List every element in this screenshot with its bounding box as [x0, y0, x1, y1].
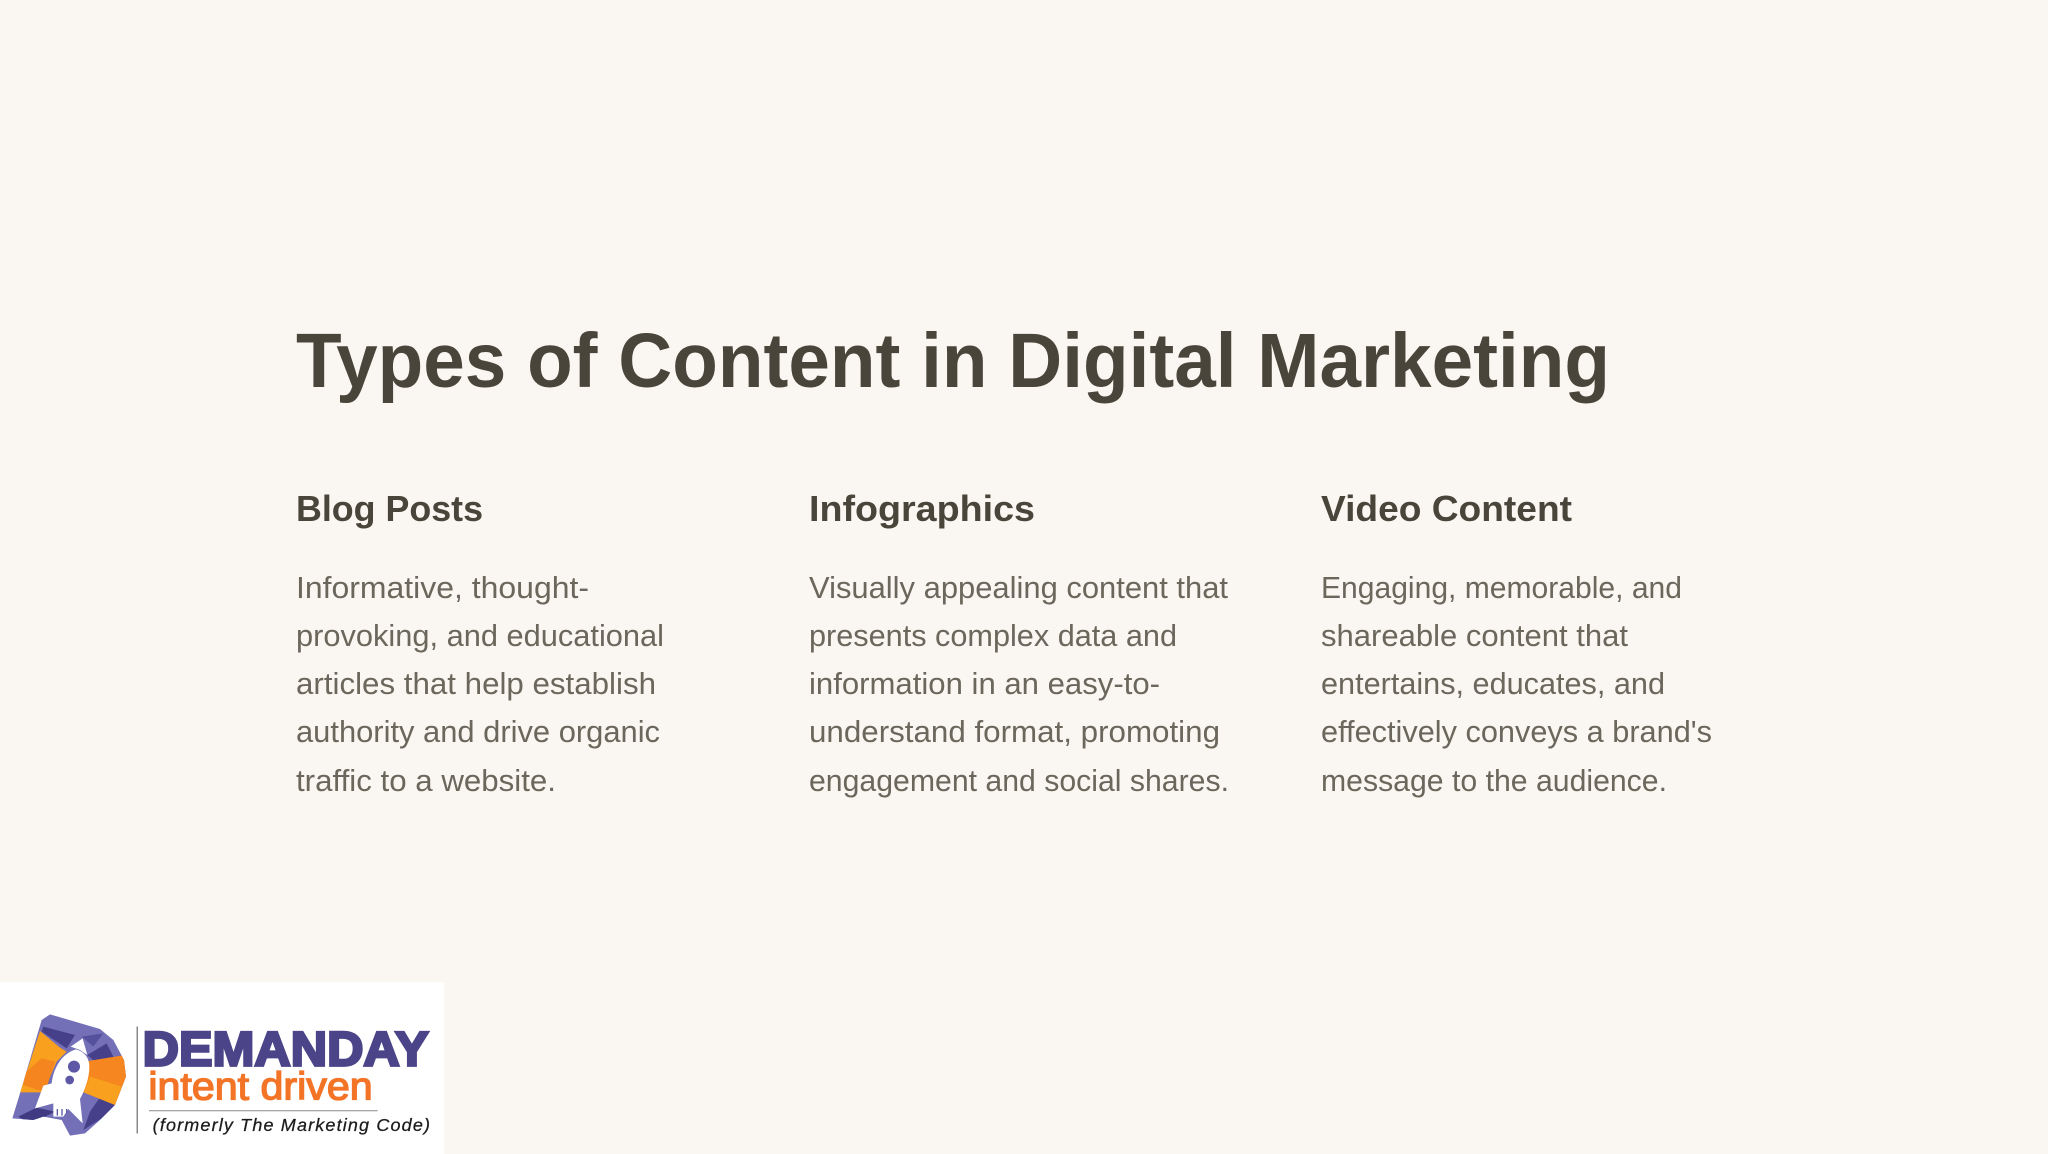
- text: blog posts description: provoking, and educational: [296, 618, 664, 653]
- logo wordmark: (formerly The Marketing Code): [153, 1115, 430, 1135]
- logo wordmark: DEMANDAY: [143, 1023, 429, 1077]
- logo wordmark: intent driven: [148, 1065, 373, 1108]
- text: infographics description: [809, 570, 1229, 798]
- text: video content description: entertains, educates, and: [1321, 666, 1665, 701]
- heading: blog posts: Blog Posts: [296, 488, 483, 529]
- text: infographics description: Visually appealing content that: [809, 570, 1228, 605]
- text: infographics description: understand format, promoting: [809, 714, 1220, 749]
- logo: Demanday: [0, 982, 444, 1154]
- text: blog posts description: traffic to a website.: [296, 763, 556, 798]
- logo divider: [136, 1026, 138, 1134]
- title: Types of Content in Digital Marketing: [296, 318, 1610, 404]
- text: video content description: [1321, 570, 1712, 798]
- text: video content description: effectively conveys a brand's: [1321, 714, 1712, 749]
- panel: infographics: [809, 488, 1229, 798]
- text: video content description: message to the audience.: [1321, 763, 1667, 798]
- text: infographics description: information in an easy-to-: [809, 666, 1160, 701]
- text: video content description: Engaging, memorable, and: [1321, 570, 1682, 605]
- logo wordmark: [143, 1023, 430, 1135]
- panel: video content: [1321, 488, 1712, 798]
- heading: video content: Video Content: [1321, 488, 1572, 529]
- text: infographics description: engagement and social shares.: [809, 763, 1229, 798]
- text: blog posts description: articles that help establish: [296, 666, 656, 701]
- text: blog posts description: authority and drive organic: [296, 714, 660, 749]
- text: infographics description: presents complex data and: [809, 618, 1177, 653]
- text: blog posts description: Informative, thought-: [296, 570, 589, 605]
- panel: blog posts: [296, 488, 664, 798]
- text: video content description: shareable content that: [1321, 618, 1628, 653]
- text: blog posts description: [296, 570, 664, 798]
- heading: infographics: Infographics: [809, 488, 1035, 529]
- icon: rocket in D: [10, 1012, 130, 1138]
